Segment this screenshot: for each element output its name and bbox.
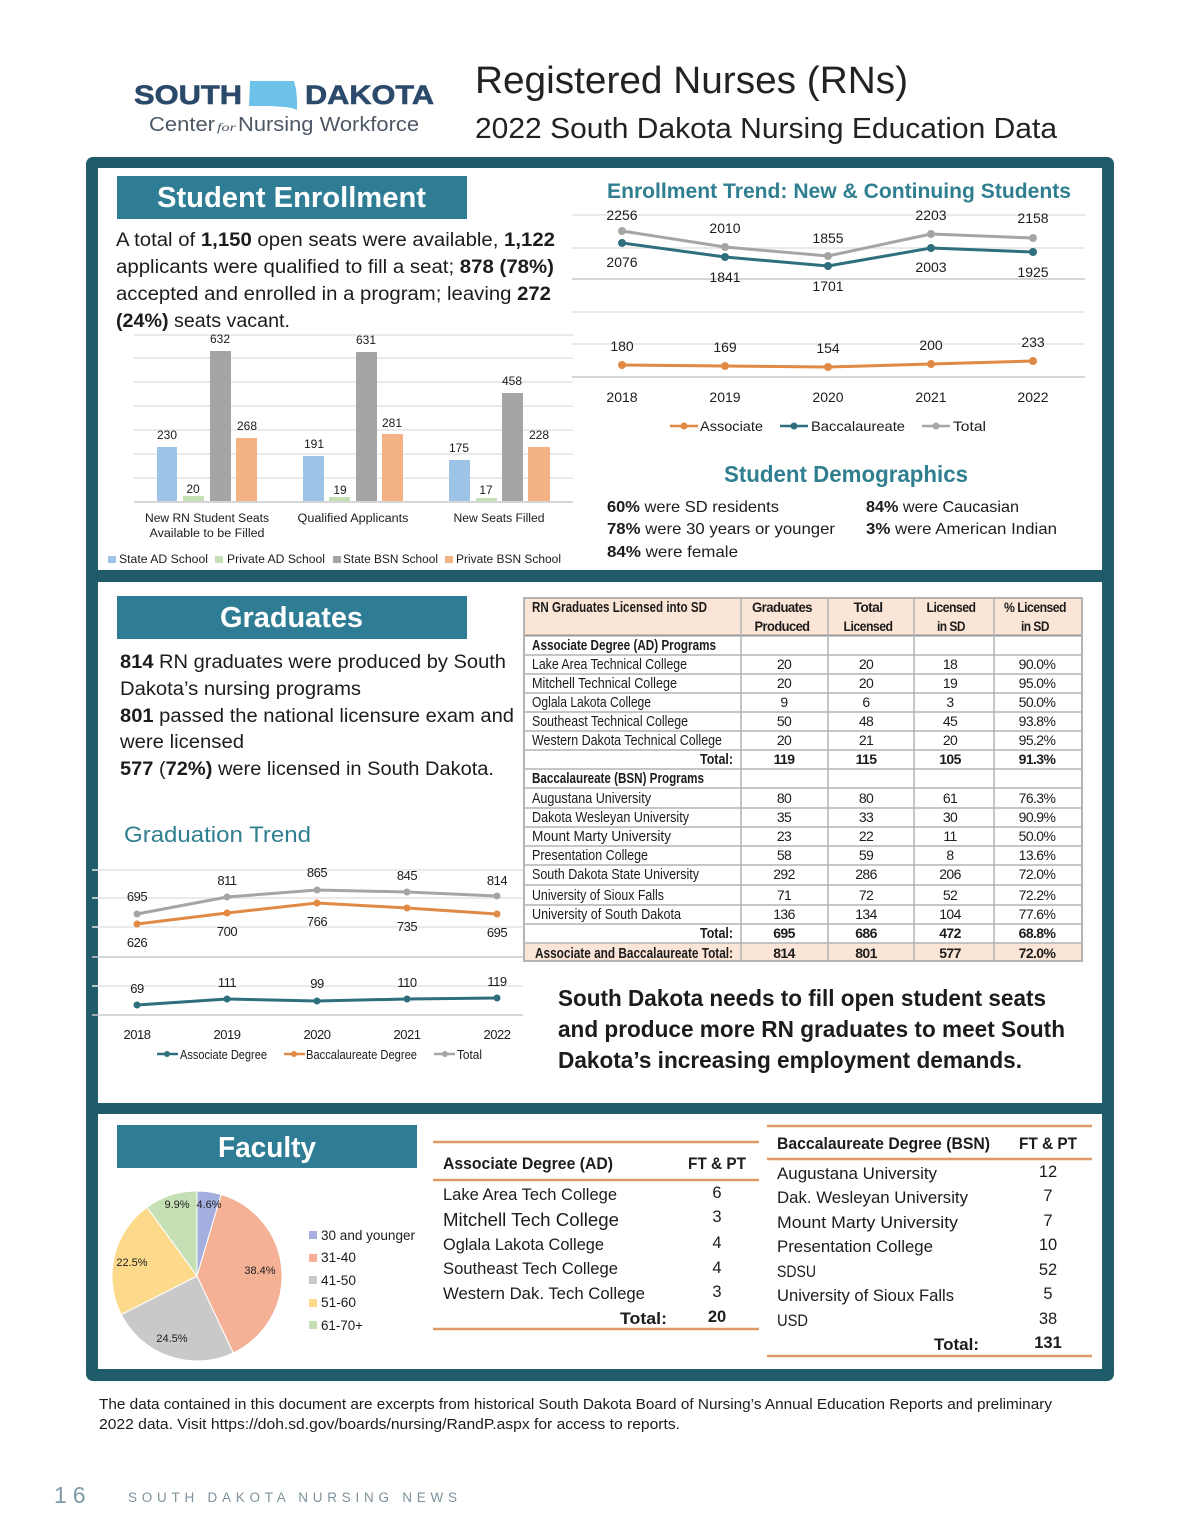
bar chart: seats, applicants, seats filled: 191: [304, 437, 324, 451]
line chart: graduation trend: 695: [127, 889, 147, 904]
heading: Graduates: Graduates: [220, 602, 363, 634]
table rows: baccalaureate programs: University of South Dakota: [532, 906, 682, 923]
table: associate degree faculty: FT & PT: [688, 1154, 747, 1173]
trend legend: Total: [953, 418, 986, 434]
table rows: baccalaureate programs: 22: [859, 828, 874, 844]
table rows: associate degree programs: 9: [780, 694, 788, 710]
line chart: graduation trend: 2022: [484, 1027, 511, 1042]
logo: South Dakota Center for Nursing Workforce: Center: [149, 114, 215, 136]
text block: demographics: 84% were Caucasian: [866, 499, 1019, 516]
table: associate degree faculty: 6: [712, 1184, 722, 1202]
table rows: associate degree programs: 95.0%: [1019, 675, 1055, 691]
title: Registered Nurses (RNs): [475, 60, 908, 102]
line chart: graduation trend: 2021: [394, 1027, 421, 1042]
table rows: baccalaureate programs: 80: [859, 790, 874, 806]
bar chart: seats, applicants, seats filled: Available to be Filled: [150, 528, 264, 540]
text block: enrollment summary: A total of 1,150 open seats were available, 1,122: [116, 230, 555, 251]
table row: grand total: 577: [939, 945, 962, 961]
table: baccalaureate degree faculty: 7: [1043, 1212, 1053, 1230]
chart legend: [108, 554, 561, 566]
pie chart: faculty age: 9.9%: [164, 1199, 190, 1211]
line chart: graduation trend: 99: [310, 976, 324, 991]
line chart: enrollment trend: 1701: [812, 278, 844, 294]
panel: graduates: [92, 582, 1102, 1103]
logo: South Dakota Center for Nursing Workforce: DAKOTA: [305, 80, 434, 110]
table rows: associate degree programs: 115: [856, 751, 877, 767]
chart legend: Private BSN School: [456, 554, 561, 566]
text block: graduates summary: Dakota’s nursing programs: [120, 679, 361, 700]
line chart: graduation trend: 2020: [304, 1027, 331, 1042]
table row: grand total: Associate and Baccalaureate Total:: [535, 945, 733, 962]
table rows: associate degree programs: 95.2%: [1019, 732, 1055, 748]
text block: demographics: 60% were SD residents: [607, 499, 779, 516]
pie legend: [309, 1228, 416, 1333]
table: associate degree faculty: Mitchell Tech College: [443, 1209, 619, 1230]
table rows: associate degree programs: Southeast Technical College: [532, 713, 688, 730]
line chart: enrollment trend: 2019: [709, 389, 741, 405]
table rows: baccalaureate programs: 13.6%: [1019, 847, 1055, 863]
text block: demographics: 78% were 30 years or younger: [607, 521, 836, 538]
table: baccalaureate degree faculty: SDSU: [777, 1262, 816, 1281]
bar chart: seats, applicants, seats filled: 268: [237, 419, 257, 433]
table rows: baccalaureate programs: 80: [777, 790, 792, 806]
line chart: graduation trend: 119: [487, 974, 507, 989]
line chart: enrollment trend: 2256: [606, 207, 638, 223]
table: associate degree faculty: Total:: [620, 1309, 667, 1328]
text block: graduates summary: were licensed: [119, 732, 244, 753]
graduation legend: [157, 1047, 482, 1062]
graduation legend: Baccalaureate Degree: [306, 1047, 417, 1062]
bar chart: seats, applicants, seats filled: New RN Student Seats: [145, 513, 269, 525]
pie legend: 31-40: [321, 1250, 356, 1265]
trend legend: Baccalaureate: [811, 418, 905, 434]
line chart: enrollment trend: 2020: [812, 389, 844, 405]
bar chart: seats, applicants, seats filled: 20: [186, 482, 200, 496]
table rows: baccalaureate programs: 8: [946, 847, 954, 863]
table rows: associate degree programs: 119: [774, 751, 795, 767]
line chart: enrollment trend: 2003: [915, 259, 947, 275]
bar chart: seats, applicants, seats filled: Qualified Applicants: [298, 513, 409, 525]
chart legend: State AD School: [119, 554, 208, 566]
table rows: baccalaureate programs: 68.8%: [1019, 925, 1056, 941]
table: associate degree faculty: 4: [712, 1234, 722, 1252]
table rows: associate degree programs: 93.8%: [1019, 713, 1055, 729]
table rows: baccalaureate programs: 134: [855, 906, 878, 922]
line chart: graduation trend: 2018: [124, 1027, 151, 1042]
logo: South Dakota Center for Nursing Workforce: SOUTH: [134, 80, 242, 110]
line chart: graduation trend: 845: [397, 868, 417, 883]
line chart: enrollment trend: 2022: [1017, 389, 1049, 405]
table: baccalaureate degree faculty: Augustana University: [777, 1164, 937, 1183]
text block: enrollment summary: [116, 230, 555, 332]
page number: 16: [54, 1482, 92, 1508]
logo: South Dakota Center for Nursing Workforce: Nursing Workforce: [238, 114, 419, 136]
heading: Graduates: [117, 596, 467, 639]
callout: fill open seats: South Dakota needs to fill open student seats: [558, 985, 1046, 1011]
table rows: baccalaureate programs: 58: [777, 847, 792, 863]
line chart: enrollment trend: 2203: [915, 207, 947, 223]
table rows: baccalaureate programs: 33: [859, 809, 874, 825]
table: baccalaureate degree faculty: 12: [1039, 1163, 1057, 1181]
text block: enrollment summary: accepted and enrolled in a program; leaving 272: [116, 284, 551, 305]
publication name: SOUTH DAKOTA NURSING NEWS: [128, 1490, 457, 1505]
logo: South Dakota Center for Nursing Workforce: for: [217, 120, 236, 134]
table rows: baccalaureate programs: 61: [943, 790, 958, 806]
table header: Graduates: [752, 599, 813, 615]
line chart: graduation trend: 110: [397, 975, 417, 990]
table rows: baccalaureate programs: University of Sioux Falls: [532, 887, 664, 904]
bar chart: seats, applicants, seats filled: 19: [333, 483, 347, 497]
heading: student demographics: Student Demographics: [724, 461, 968, 487]
table rows: associate degree programs: 6: [862, 694, 870, 710]
table header: Licensed: [844, 618, 893, 634]
line chart: graduation trend: 111: [218, 975, 236, 990]
table header: in SD: [1021, 618, 1049, 634]
table: associate degree faculty: Southeast Tech College: [443, 1259, 618, 1278]
line chart: graduation trend: 69: [130, 981, 144, 996]
table rows: baccalaureate programs: Augustana University: [532, 790, 651, 807]
bar chart: seats, applicants, seats filled: 175: [449, 441, 469, 455]
table rows: associate degree programs: 20: [859, 675, 874, 691]
line chart: enrollment trend: 200: [919, 337, 943, 353]
line chart: enrollment trend: 169: [713, 339, 737, 355]
line chart: graduation trend: 700: [217, 924, 237, 939]
table header: % Licensed: [1004, 599, 1066, 615]
table: associate degree faculty: [433, 1142, 759, 1329]
table rows: baccalaureate programs: 292: [773, 866, 796, 882]
table rows: baccalaureate programs: Baccalaureate (BSN) Programs: [532, 770, 704, 787]
table: baccalaureate degree faculty: Mount Marty University: [777, 1213, 959, 1232]
table rows: associate degree programs: 18: [943, 656, 958, 672]
line chart: graduation trend: 865: [307, 865, 327, 880]
table rows: baccalaureate programs: 686: [855, 925, 878, 941]
line chart: enrollment trend: 1841: [709, 269, 741, 285]
heading: Student Enrollment: Student Enrollment: [157, 182, 426, 214]
bar chart: seats, applicants, seats filled: 632: [210, 332, 230, 346]
text block: demographics: 84% were female: [607, 544, 738, 561]
pie legend: 30 and younger: [321, 1228, 416, 1243]
callout: fill open seats: Dakota’s increasing employment demands.: [558, 1047, 1022, 1073]
pie legend: 51-60: [321, 1295, 356, 1310]
table header: [532, 599, 1066, 634]
table rows: baccalaureate programs: South Dakota State University: [532, 866, 699, 883]
table rows: associate degree programs: 20: [943, 732, 958, 748]
logo: South Dakota Center for Nursing Workforce: [134, 80, 434, 136]
line chart: graduation trend: [92, 865, 523, 1062]
table: associate degree faculty: Western Dak. Tech College: [443, 1284, 645, 1303]
line chart: enrollment trend: 2158: [1017, 210, 1049, 226]
table rows: associate degree programs: Oglala Lakota College: [532, 694, 651, 711]
table: baccalaureate degree faculty: 131: [1034, 1334, 1062, 1352]
heading: Faculty: Faculty: [218, 1132, 316, 1164]
pie chart: faculty age: [112, 1191, 282, 1361]
table: baccalaureate degree faculty: Total:: [934, 1335, 979, 1354]
table: baccalaureate degree faculty: Presentation College: [777, 1237, 933, 1256]
table rows: associate degree programs: Western Dakota Technical College: [532, 732, 722, 749]
table: baccalaureate degree faculty: 52: [1039, 1261, 1057, 1279]
line chart: enrollment trend: 1855: [812, 230, 844, 246]
line chart: enrollment trend: 233: [1021, 334, 1045, 350]
chart legend: Private AD School: [227, 554, 325, 566]
table: associate degree faculty: 3: [712, 1208, 722, 1226]
table rows: associate degree programs: 21: [859, 732, 874, 748]
table row: grand total: 814: [773, 945, 796, 961]
line chart: enrollment trend: 2010: [709, 220, 741, 236]
table rows: associate degree programs: 45: [943, 713, 958, 729]
line chart: enrollment trend: 154: [816, 340, 840, 356]
table rows: baccalaureate programs: Total:: [700, 925, 733, 942]
bar chart: seats, applicants, seats filled: New Seats Filled: [454, 513, 544, 525]
chart heading: enrollment trend: Enrollment Trend: New & Continuing Students: [607, 179, 1071, 203]
table rows: associate degree programs: Total:: [700, 751, 733, 768]
bar chart: seats, applicants, seats filled: 230: [157, 428, 177, 442]
bar chart: seats, applicants, seats filled: 281: [382, 416, 402, 430]
line chart: graduation trend: 2019: [214, 1027, 241, 1042]
line chart: enrollment trend: 180: [610, 338, 634, 354]
table rows: associate degree programs: 91.3%: [1019, 751, 1056, 767]
teal outer frame: [86, 157, 1114, 1381]
pie chart: faculty age: 4.6%: [196, 1199, 222, 1211]
table rows: baccalaureate programs: 206: [939, 866, 962, 882]
table: baccalaureate degree faculty: USD: [777, 1311, 808, 1330]
table rows: baccalaureate programs: 90.9%: [1019, 809, 1055, 825]
table rows: associate degree programs: 90.0%: [1019, 656, 1055, 672]
table: baccalaureate degree faculty: 5: [1043, 1285, 1053, 1303]
table rows: associate degree programs: 19: [943, 675, 958, 691]
table rows: baccalaureate programs: 286: [855, 866, 878, 882]
table rows: associate degree programs: 50: [777, 713, 792, 729]
table: associate degree faculty: 3: [712, 1283, 722, 1301]
table rows: baccalaureate programs: Dakota Wesleyan University: [532, 809, 689, 826]
table rows: baccalaureate programs: 59: [859, 847, 874, 863]
heading: Student Enrollment: [117, 176, 467, 219]
pie legend: 41-50: [321, 1273, 356, 1288]
table rows: associate degree programs: [532, 637, 1056, 768]
table row: grand total: 72.0%: [1019, 945, 1056, 961]
table rows: baccalaureate programs: 30: [943, 809, 958, 825]
line chart: enrollment trend: 2021: [915, 389, 947, 405]
table rows: associate degree programs: 105: [939, 751, 962, 767]
text block: demographics: [607, 499, 1057, 561]
table rows: baccalaureate programs: 76.3%: [1019, 790, 1055, 806]
table: associate degree faculty: 4: [712, 1259, 722, 1277]
table rows: baccalaureate programs: 72: [859, 887, 874, 903]
text block: data source note: 2022 data. Visit https://doh.sd.gov/boards/nursing/RandP.aspx for access to reports.: [99, 1417, 680, 1433]
table rows: associate degree programs: Lake Area Technical College: [532, 656, 687, 673]
table: baccalaureate degree faculty: [767, 1126, 1092, 1356]
line chart: enrollment trend: 2018: [606, 389, 638, 405]
table rows: associate degree programs: Mitchell Technical College: [532, 675, 677, 692]
bar chart: seats, applicants, seats filled: 631: [356, 333, 376, 347]
table rows: baccalaureate programs: Mount Marty University: [532, 828, 671, 845]
table header: Licensed: [926, 599, 976, 615]
line chart: graduation trend: 766: [307, 914, 327, 929]
line chart: enrollment trend: 2076: [606, 254, 638, 270]
table rows: baccalaureate programs: 472: [939, 925, 962, 941]
panel: faculty: [98, 1114, 1102, 1369]
text block: graduates summary: [119, 652, 514, 780]
table rows: associate degree programs: 48: [859, 713, 874, 729]
table: baccalaureate degree faculty: FT & PT: [1019, 1134, 1078, 1153]
table rows: associate degree programs: Associate Degree (AD) Programs: [532, 637, 716, 654]
pie chart: faculty age: 38.4%: [244, 1265, 276, 1277]
table: associate degree faculty: 20: [708, 1308, 726, 1326]
pie legend: 61-70+: [321, 1318, 363, 1333]
table rows: associate degree programs: 20: [777, 675, 792, 691]
heading: Faculty: [117, 1125, 417, 1168]
table rows: baccalaureate programs: 52: [943, 887, 958, 903]
table header: RN Graduates Licensed into SD: [532, 599, 707, 616]
bar chart: seats, applicants, seats filled: [108, 332, 573, 566]
panel: student enrollment: [98, 168, 1102, 570]
trend legend: [670, 418, 986, 434]
graduation legend: Total: [457, 1047, 482, 1062]
table: baccalaureate degree faculty: University of Sioux Falls: [777, 1286, 954, 1305]
bar chart: seats, applicants, seats filled: 228: [529, 428, 549, 442]
table: baccalaureate degree faculty: 7: [1043, 1187, 1053, 1205]
table: associate degree faculty: Lake Area Tech College: [443, 1185, 617, 1204]
table rows: baccalaureate programs: 71: [777, 887, 792, 903]
table rows: baccalaureate programs: 35: [777, 809, 792, 825]
table: baccalaureate degree faculty: 10: [1039, 1236, 1057, 1254]
callout: fill open seats: [558, 985, 1065, 1073]
table header: in SD: [937, 618, 965, 634]
table rows: baccalaureate programs: 11: [943, 828, 957, 844]
text block: graduates summary: 577 (72%) were licensed in South Dakota.: [120, 759, 494, 780]
table rows: associate degree programs: 20: [777, 732, 792, 748]
text block: data source note: The data contained in this document are excerpts from historical South Dakota Board of Nursing’s Annual Education Reports and preliminary: [99, 1397, 1053, 1413]
text block: enrollment summary: applicants were qualified to fill a seat; 878 (78%): [116, 257, 554, 278]
heading: graduation trend: Graduation Trend: [124, 822, 311, 847]
text block: data source note: [99, 1397, 1053, 1433]
table rows: baccalaureate programs: Presentation College: [532, 847, 648, 864]
line chart: graduation trend: 626: [127, 935, 147, 950]
table row: grand total: [535, 945, 1056, 962]
table rows: baccalaureate programs: 104: [939, 906, 962, 922]
table rows: baccalaureate programs: 77.6%: [1019, 906, 1055, 922]
graduation legend: Associate Degree: [180, 1047, 267, 1062]
bar chart: seats, applicants, seats filled: 458: [502, 374, 522, 388]
line chart: graduation trend: 814: [487, 873, 507, 888]
line chart: graduation trend: 695: [487, 925, 507, 940]
table: baccalaureate degree faculty: 38: [1039, 1310, 1057, 1328]
table rows: baccalaureate programs: 136: [773, 906, 796, 922]
table rows: baccalaureate programs: 23: [777, 828, 792, 844]
table header: Produced: [754, 618, 810, 634]
line chart: enrollment trend: 1925: [1017, 264, 1049, 280]
table: baccalaureate degree faculty: Baccalaureate Degree (BSN): [777, 1134, 990, 1153]
table rows: baccalaureate programs: [532, 770, 1056, 942]
text block: demographics: 3% were American Indian: [866, 521, 1057, 538]
text block: graduates summary: 814 RN graduates were produced by South: [120, 652, 506, 673]
subtitle: 2022 South Dakota Nursing Education Data: [475, 113, 1058, 145]
callout: fill open seats: and produce more RN graduates to meet South: [558, 1016, 1065, 1042]
pie chart: faculty age: 22.5%: [116, 1257, 148, 1269]
trend legend: Associate: [700, 418, 763, 434]
table rows: associate degree programs: 20: [859, 656, 874, 672]
text block: enrollment summary: (24%) seats vacant.: [116, 311, 290, 332]
table rows: associate degree programs: 3: [946, 694, 954, 710]
table: associate degree faculty: Oglala Lakota College: [443, 1235, 604, 1254]
table rows: associate degree programs: 20: [777, 656, 792, 672]
table header: Total: [854, 599, 882, 615]
table rows: baccalaureate programs: 50.0%: [1019, 828, 1055, 844]
table rows: baccalaureate programs: 695: [773, 925, 796, 941]
chart legend: State BSN School: [343, 554, 438, 566]
line chart: graduation trend: 735: [397, 919, 417, 934]
table rows: associate degree programs: 50.0%: [1019, 694, 1055, 710]
table rows: baccalaureate programs: 72.2%: [1019, 887, 1055, 903]
table rows: baccalaureate programs: 72.0%: [1019, 866, 1055, 882]
line chart: enrollment trend: [572, 207, 1085, 434]
table: baccalaureate degree faculty: Dak. Wesleyan University: [777, 1188, 968, 1207]
bar chart: seats, applicants, seats filled: 17: [479, 483, 493, 497]
text block: graduates summary: 801 passed the national licensure exam and: [120, 706, 514, 727]
line chart: graduation trend: 811: [217, 873, 237, 888]
table row: grand total: 801: [855, 945, 878, 961]
table: RN graduates licensed into SD: [524, 598, 1082, 962]
pie chart: faculty age: 24.5%: [156, 1333, 188, 1345]
table: associate degree faculty: Associate Degree (AD): [443, 1154, 613, 1173]
